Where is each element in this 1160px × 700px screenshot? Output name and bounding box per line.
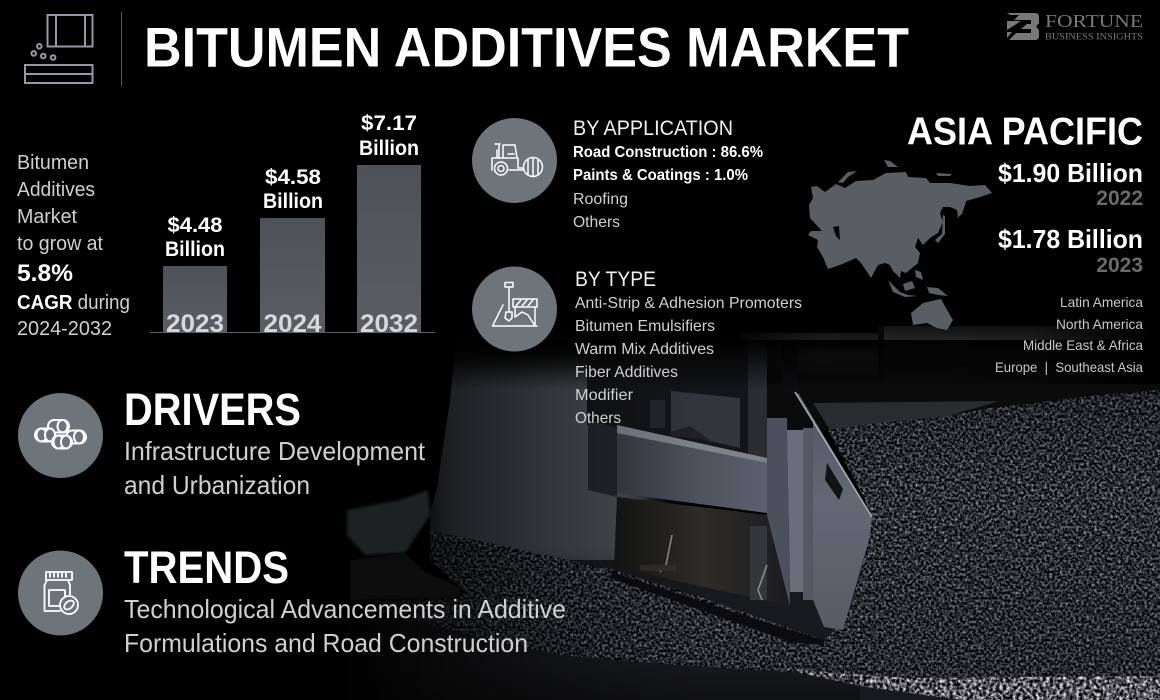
other regions list — [995, 294, 1143, 375]
by type list: BY TYPE — [575, 268, 656, 291]
trends heading and text — [124, 542, 566, 658]
CAGR text block: 2024-2032 — [17, 318, 112, 340]
logo: Fortune Business Insights: BUSINESS INSIGHTS — [1045, 32, 1143, 42]
bar chart: market size: Billion — [359, 136, 419, 160]
trends heading and text: Technological Advancements in Additive — [124, 594, 566, 624]
back structure — [587, 340, 748, 460]
by type list: Modifier — [575, 387, 634, 404]
end plate — [795, 392, 872, 630]
other regions list: Europe | Southeast Asia — [995, 359, 1143, 375]
by application list: Roofing — [573, 191, 628, 208]
by application list — [573, 117, 763, 231]
logo: Fortune Business Insights — [1007, 11, 1143, 42]
CAGR text block: CAGR during — [17, 292, 130, 314]
by type list: Fiber Additives — [575, 364, 678, 381]
by type list: Warm Mix Additives — [575, 341, 714, 358]
by type list: Bitumen Emulsifiers — [575, 318, 715, 335]
drivers heading and text: Infrastructure Development — [124, 436, 426, 466]
CAGR text block: Additives — [17, 179, 95, 201]
header divider — [120, 12, 122, 86]
CAGR text block — [17, 152, 130, 340]
header icon: bitumen blocks and granules — [25, 15, 92, 83]
worker leg silhouette — [330, 330, 463, 600]
Asia Pacific figures: 2022 — [1096, 187, 1143, 210]
Asia Pacific figures: $1.78 Billion — [998, 224, 1143, 254]
trends heading and text: TRENDS — [124, 542, 289, 593]
bar chart: market size: 2023 — [166, 310, 224, 338]
drivers heading and text: DRIVERS — [124, 384, 301, 435]
CAGR text block: to grow at — [17, 233, 103, 255]
bar chart: market size: 2024 — [264, 310, 322, 338]
icon: additive jar — [18, 550, 103, 636]
bar chart: market size: $7.17 — [361, 111, 417, 135]
Asia Pacific figures — [907, 110, 1143, 277]
bar chart: market size: $4.58 — [265, 165, 321, 189]
by application list: Others — [573, 214, 620, 231]
Asia Pacific figures: $1.90 Billion — [998, 158, 1143, 188]
by application list: Road Construction : 86.6% — [573, 144, 763, 161]
icon: pipes — [18, 393, 103, 478]
bar chart: market size: $4.48 — [168, 213, 223, 237]
by application list: Paints & Coatings : 1.0% — [573, 167, 748, 184]
Asia Pacific figures: ASIA PACIFIC — [907, 110, 1143, 154]
by type list: Others — [575, 410, 621, 427]
logo: Fortune Business Insights: FORTUNE — [1045, 11, 1143, 31]
other regions list: North America — [1056, 316, 1143, 332]
map: Asia Pacific — [808, 160, 992, 330]
drivers heading and text: and Urbanization — [124, 470, 310, 500]
other regions list: Middle East & Africa — [1023, 337, 1143, 353]
by type list — [575, 268, 802, 427]
icon: shovel and barrier — [472, 266, 557, 352]
by application list: BY APPLICATION — [573, 117, 733, 140]
icon: road roller — [472, 118, 557, 203]
title: BITUMEN ADDITIVES MARKET — [144, 16, 909, 78]
trends heading and text: Formulations and Road Construction — [124, 628, 528, 658]
bar chart: market size: Billion — [263, 189, 323, 213]
background photo: paver and gravel — [346, 326, 1160, 700]
CAGR text block: Market — [17, 206, 77, 228]
beam and lower box — [617, 433, 767, 513]
CAGR text block: Bitumen — [17, 152, 89, 174]
Asia Pacific figures: 2023 — [1096, 254, 1143, 277]
drivers heading and text — [124, 384, 426, 500]
bar chart: market size — [150, 111, 435, 338]
CAGR text block: 5.8% — [17, 260, 73, 287]
bar chart: market size: Billion — [165, 237, 225, 261]
other regions list: Latin America — [1060, 294, 1143, 310]
bar chart: market size: 2032 — [360, 310, 418, 338]
by type list: Anti-Strip & Adhesion Promoters — [575, 295, 802, 312]
